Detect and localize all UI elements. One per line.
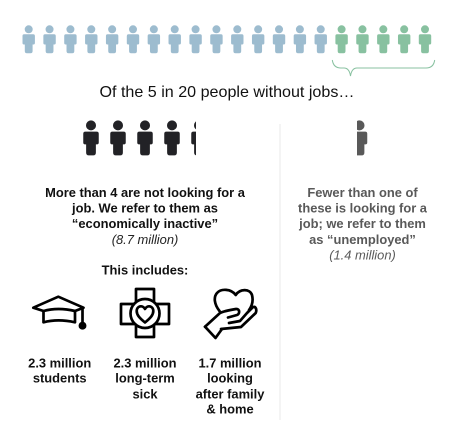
label: looking after family and home: after family bbox=[196, 386, 265, 401]
text block: unemployed: job; we refer to them bbox=[298, 216, 426, 231]
text block: unemployed: these is looking for a bbox=[298, 200, 428, 216]
text block: unemployed: Fewer than one of bbox=[307, 185, 418, 200]
icon: hand holding heart bbox=[205, 290, 256, 338]
label: students bbox=[28, 355, 91, 386]
text block: economically inactive bbox=[45, 185, 246, 247]
heading: Of the 5 in 20 people without jobs… bbox=[100, 83, 354, 101]
text block: economically inactive: job. We refer to them as bbox=[71, 200, 218, 216]
text block: unemployed: as “unemployed” bbox=[309, 232, 416, 247]
text block: economically inactive: “economically inactive” bbox=[72, 216, 218, 231]
label: looking after family and home: & home bbox=[206, 402, 254, 416]
label: long-term sick: 2.3 million bbox=[113, 355, 177, 370]
label: long-term sick bbox=[113, 355, 177, 401]
icon row: 15 employed people bbox=[22, 25, 327, 53]
divider bbox=[279, 124, 281, 420]
label: students: students bbox=[33, 370, 87, 386]
icon: graduation cap bbox=[33, 297, 85, 328]
label: students: 2.3 million bbox=[28, 355, 91, 370]
bracket under green people bbox=[332, 60, 435, 76]
label: long-term sick: sick bbox=[132, 386, 158, 401]
subheading: This includes: bbox=[102, 262, 188, 278]
text block: unemployed: (1.4 million) bbox=[329, 248, 396, 262]
label: looking after family and home: 1.7 million bbox=[198, 355, 262, 370]
label: long-term sick: long-term bbox=[115, 370, 175, 386]
icon row: economically inactive people bbox=[83, 120, 207, 155]
icon: medical cross with heart bbox=[121, 289, 169, 337]
text block: economically inactive: More than 4 are not looking for a bbox=[45, 185, 246, 200]
label: looking after family and home bbox=[196, 355, 265, 416]
text block: unemployed bbox=[298, 185, 428, 262]
icon row: 5 people without jobs bbox=[335, 25, 431, 53]
icon: partial unemployed person bbox=[357, 120, 368, 156]
label: looking after family and home: looking bbox=[207, 370, 253, 386]
text block: economically inactive: (8.7 million) bbox=[112, 232, 178, 247]
